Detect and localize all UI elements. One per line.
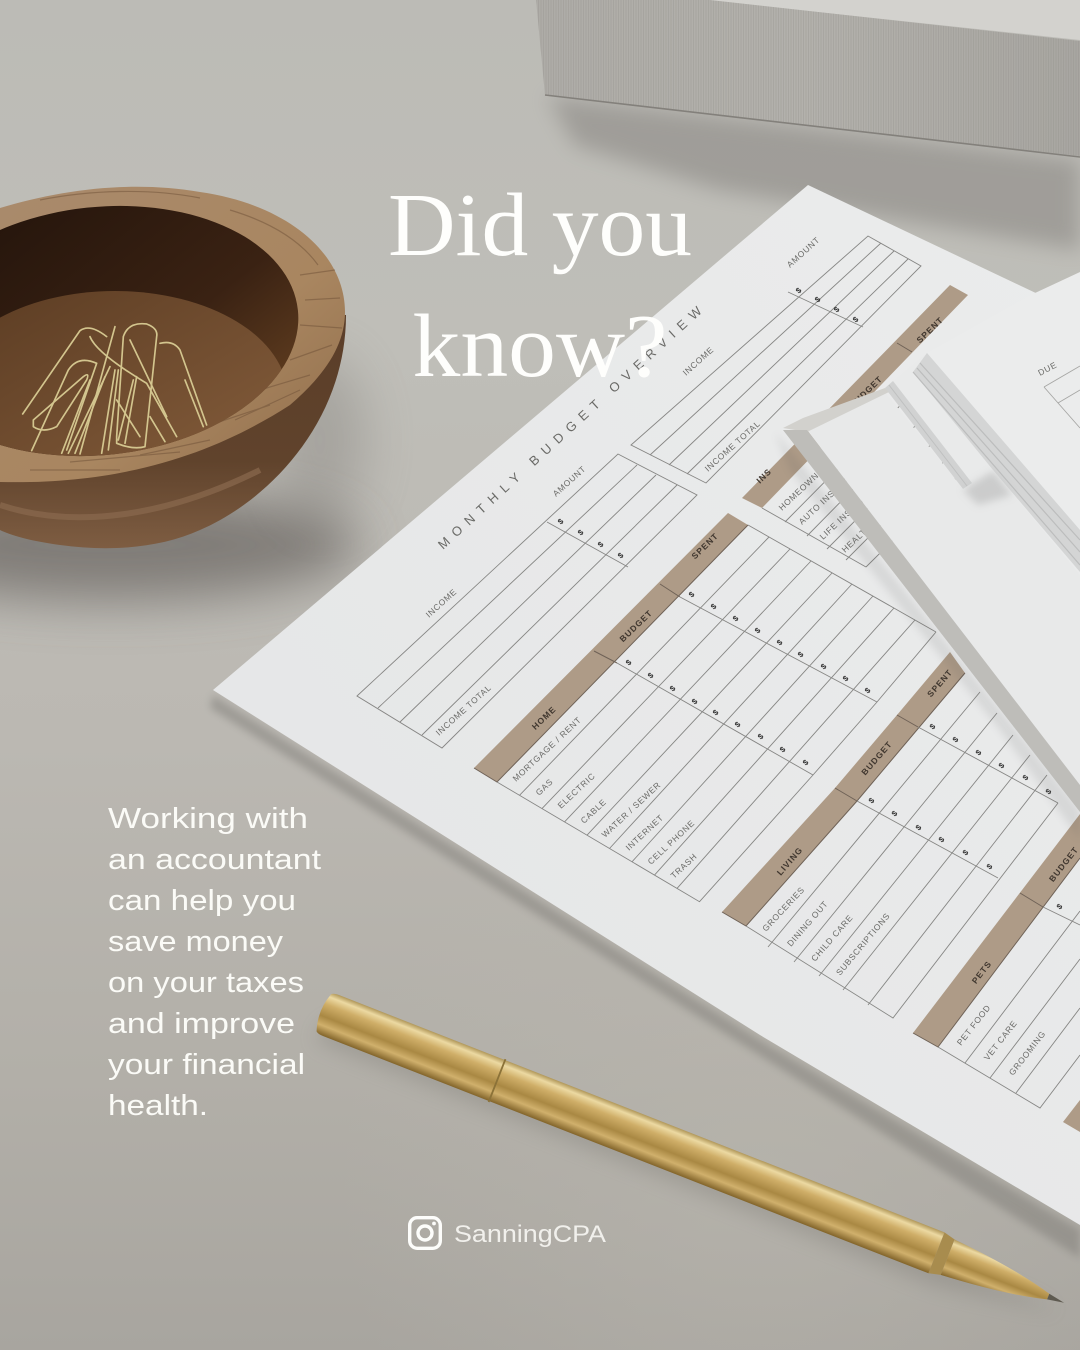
- home table: GAS: [534, 776, 555, 797]
- pets table: $: [1055, 902, 1065, 911]
- budget sheet: [213, 185, 1080, 1225]
- shadow under tab: [963, 471, 1012, 505]
- income table right: $: [813, 294, 823, 304]
- icon: instagram: [410, 1218, 440, 1248]
- living table: [722, 652, 1058, 1018]
- home dollar signs: $: [624, 657, 634, 667]
- second sheet, top right: DUE: [1036, 360, 1059, 378]
- home table: [474, 513, 936, 902]
- folder shadow: [775, 432, 1080, 840]
- insurance table: BUDGET: [847, 374, 884, 410]
- next table band: [1063, 1100, 1080, 1132]
- home rows: [497, 525, 936, 902]
- home dollar signs: $: [646, 670, 656, 680]
- home table: ELECTRIC: [556, 771, 597, 810]
- home dollar signs: $: [668, 683, 678, 693]
- tab edge strips: [885, 381, 972, 489]
- living table: CHILD CARE: [809, 913, 855, 963]
- bowl body: [0, 300, 346, 548]
- body text: [108, 803, 321, 1122]
- home header band: [474, 513, 748, 782]
- home dollar signs: $: [709, 601, 719, 611]
- income table right: [631, 235, 921, 483]
- body text: on your taxes: [108, 967, 304, 999]
- handle text: SanningCPA: [454, 1221, 606, 1248]
- insurance table: HOMEOWNER: [777, 461, 830, 512]
- paper shadow: [210, 695, 1080, 1258]
- income table right: $: [832, 304, 842, 314]
- living table: $: [867, 796, 877, 805]
- living table: SUBSCRIPTIONS: [834, 911, 892, 977]
- folder binding: [783, 430, 1080, 812]
- income table right: INCOME: [681, 344, 716, 377]
- stacked card edges: [913, 353, 1080, 572]
- title: know?: [412, 297, 668, 396]
- income table left: [357, 454, 697, 748]
- home table: BUDGET: [617, 608, 654, 644]
- box shadow: [548, 96, 1080, 250]
- home dollar signs: $: [756, 731, 766, 741]
- folder top strip: [783, 388, 889, 432]
- insurance table: HEALTH: [840, 522, 874, 554]
- social handle: [410, 1218, 606, 1248]
- body text: an accountant: [108, 844, 321, 876]
- tab face: [885, 353, 993, 489]
- living table: $: [961, 848, 971, 857]
- home dollar signs: $: [775, 637, 785, 647]
- home table: TRASH: [669, 851, 699, 880]
- home dollar signs: [624, 589, 873, 767]
- home table: CELL PHONE: [646, 818, 697, 866]
- pets table: PETS: [970, 959, 994, 986]
- living table: GROCERIES: [760, 885, 807, 933]
- body text: and improve: [108, 1008, 295, 1040]
- box front face: [536, 0, 1080, 156]
- income table right: INCOME TOTAL: [703, 418, 762, 473]
- body text: save money: [108, 926, 284, 958]
- home dollar signs: $: [841, 673, 851, 683]
- title: [388, 176, 692, 396]
- living table: $: [890, 809, 900, 818]
- pets table: PET FOOD: [955, 1003, 993, 1047]
- home dollar signs: $: [753, 625, 763, 635]
- home dollar signs: $: [690, 696, 700, 706]
- home dollar signs: $: [796, 649, 806, 659]
- home dollar signs: $: [711, 707, 721, 717]
- bowl interior: [0, 187, 311, 475]
- pets table: [913, 814, 1080, 1132]
- body text: Working with: [108, 803, 308, 835]
- living table: $: [1044, 787, 1054, 796]
- paperclips: [23, 324, 207, 454]
- pets table: BUDGET: [1047, 845, 1080, 884]
- income table left: $: [556, 516, 566, 526]
- living table: $: [997, 761, 1007, 770]
- insurance table: AUTO INSURANCE: [797, 461, 866, 526]
- bowl shadow: [0, 355, 365, 600]
- pets table: GROOMING: [1007, 1029, 1048, 1077]
- income table left: INCOME: [424, 586, 459, 619]
- body text: can help you: [108, 885, 296, 917]
- box top surface: [705, 0, 1080, 40]
- home dollar signs: $: [687, 589, 697, 599]
- income table right: $: [851, 314, 861, 324]
- living table: BUDGET: [859, 739, 894, 777]
- living table: $: [1021, 773, 1031, 782]
- home table: WATER / SEWER: [600, 780, 663, 839]
- income table left: AMOUNT: [551, 464, 588, 498]
- home dollar signs: $: [819, 661, 829, 671]
- living table: $: [974, 748, 984, 757]
- living table: $: [985, 862, 995, 871]
- income table left: $: [616, 550, 626, 560]
- living table: $: [951, 735, 961, 744]
- income table right: AMOUNT: [785, 235, 822, 269]
- home labels: MORTGAGE / RENT: [511, 715, 583, 783]
- income table left: INCOME TOTAL: [434, 682, 493, 737]
- income table right: $: [794, 285, 804, 295]
- folder cover: [783, 388, 1080, 812]
- gold pen: [312, 990, 1072, 1324]
- title: Did you: [388, 176, 692, 275]
- insurance table: SPENT: [914, 315, 945, 345]
- pets table: VET CARE: [982, 1018, 1019, 1062]
- rim wood grain: [30, 191, 342, 470]
- linen box, top right: [536, 0, 1080, 157]
- home dollar signs: $: [863, 685, 873, 695]
- living table: SPENT: [925, 667, 954, 699]
- living table: LIVING: [775, 845, 805, 877]
- bowl floor: [0, 291, 282, 456]
- body text: your financial: [108, 1049, 305, 1081]
- insurance table: [742, 285, 1040, 567]
- insurance table: INS: [754, 466, 774, 485]
- card tab and stacked edges: [885, 353, 1080, 572]
- home dollar signs: $: [731, 613, 741, 623]
- home table: HOME: [530, 704, 558, 732]
- insurance table: LIFE INSURANCE: [818, 479, 883, 541]
- home dollar signs: $: [801, 757, 811, 767]
- home table: CABLE: [579, 797, 608, 825]
- home table: INTERNET: [624, 812, 666, 852]
- living table: $: [937, 835, 947, 844]
- living table: $: [928, 722, 938, 731]
- home dollar signs: $: [733, 719, 743, 729]
- income table left: $: [596, 539, 606, 549]
- bowl rim: [0, 187, 345, 482]
- income table left: $: [576, 527, 586, 537]
- wooden bowl with paperclips: [0, 187, 346, 548]
- home dollar signs: $: [778, 744, 788, 754]
- living table: DINING OUT: [785, 899, 830, 948]
- body text: health.: [108, 1090, 208, 1122]
- sheet title: MONTHLY BUDGET OVERVIEW: [435, 303, 705, 552]
- living table: $: [914, 823, 924, 832]
- second sheet, top right: [927, 272, 1080, 570]
- pen shadow: [315, 1020, 1060, 1312]
- home table: SPENT: [689, 531, 720, 561]
